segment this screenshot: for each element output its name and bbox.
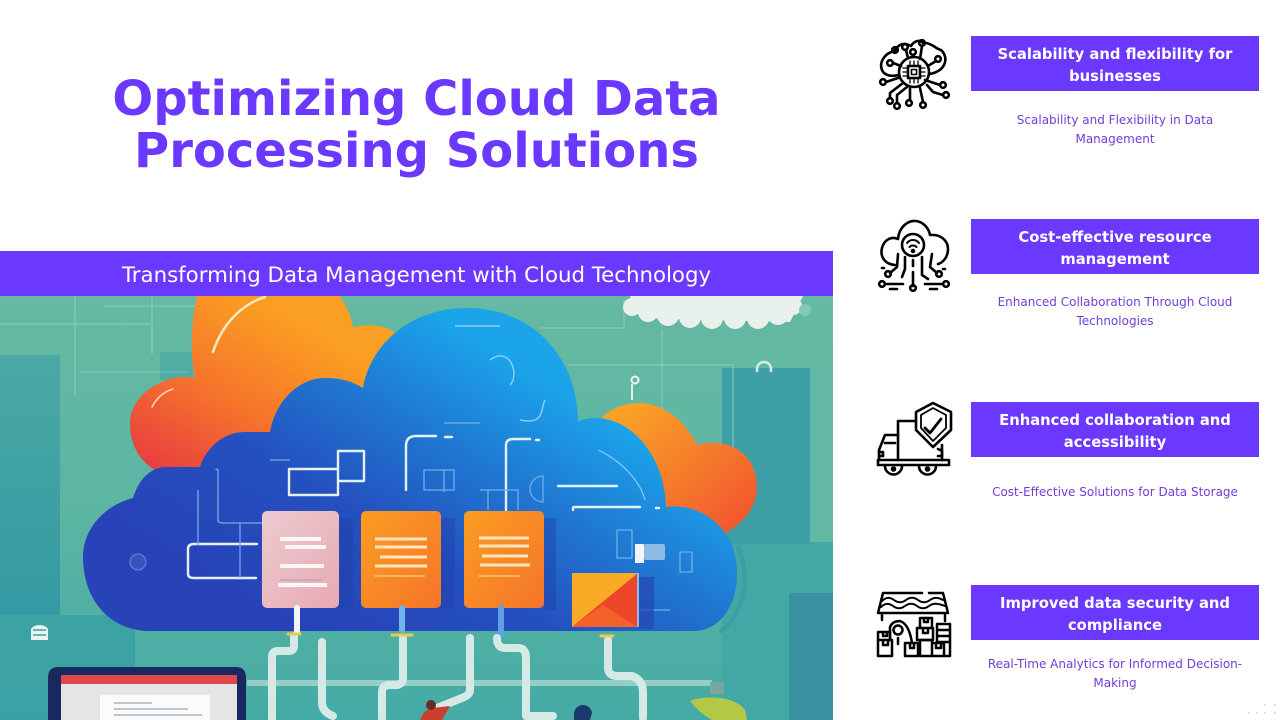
pipes [247,608,712,720]
laptop [48,667,246,720]
document: pink [262,511,339,608]
document: orange 2 [464,511,544,608]
panel: security heading: Improved data security and [1000,595,1230,612]
panel: cost heading: Cost-effective resource [1018,229,1212,246]
chat tag [635,544,665,563]
title: Processing Solutions [134,123,699,179]
icon: warehouse with packages [876,592,952,658]
panel: scalability heading: businesses [1069,68,1161,85]
padlock glyph left [31,625,48,640]
panel: scalability heading: Scalability and flexibility for [998,46,1232,63]
padlock glyph right [757,362,771,372]
people and plant [420,682,747,720]
panel: collaboration heading [971,402,1259,457]
panel: collaboration heading: Enhanced collaboration and [999,412,1231,429]
title [112,71,721,179]
background [0,296,833,720]
panel: collaboration heading: accessibility [1064,434,1166,451]
envelope [572,573,654,629]
panel: cost heading: management [1060,251,1170,268]
back orange cloud right [602,403,757,537]
decorative dots [1248,704,1276,714]
back orange cloud left [130,296,404,480]
icon: delivery truck with shield [876,402,952,476]
icon: cloud wifi network [878,220,950,292]
illustration: cloud data processing [0,296,833,720]
panel: security heading: compliance [1068,617,1162,634]
panel: cost description: Enhanced Collaboration Through Cloud Technologies [998,295,1232,328]
document: orange 1 [361,511,441,608]
title: Optimizing Cloud Data [112,71,721,127]
panel: security heading [971,585,1259,640]
white cloud [623,296,803,329]
panel: scalability description: Scalability and Flexibility in Data Management [1017,113,1213,146]
subtitle banner: Transforming Data Management with Cloud Technology [122,263,711,288]
circuit traces [188,436,659,578]
main blue cloud [83,308,745,632]
panel: cost heading [971,219,1259,274]
panel: collaboration description: Cost-Effective Solutions for Data Storage [992,485,1238,499]
panel: security description: Real-Time Analytics for Informed Decision-Making [988,657,1242,690]
subtitle banner [0,251,833,296]
document shadows [339,518,556,610]
icon: cloud circuit chip [878,38,950,110]
panel: scalability heading [971,36,1259,91]
